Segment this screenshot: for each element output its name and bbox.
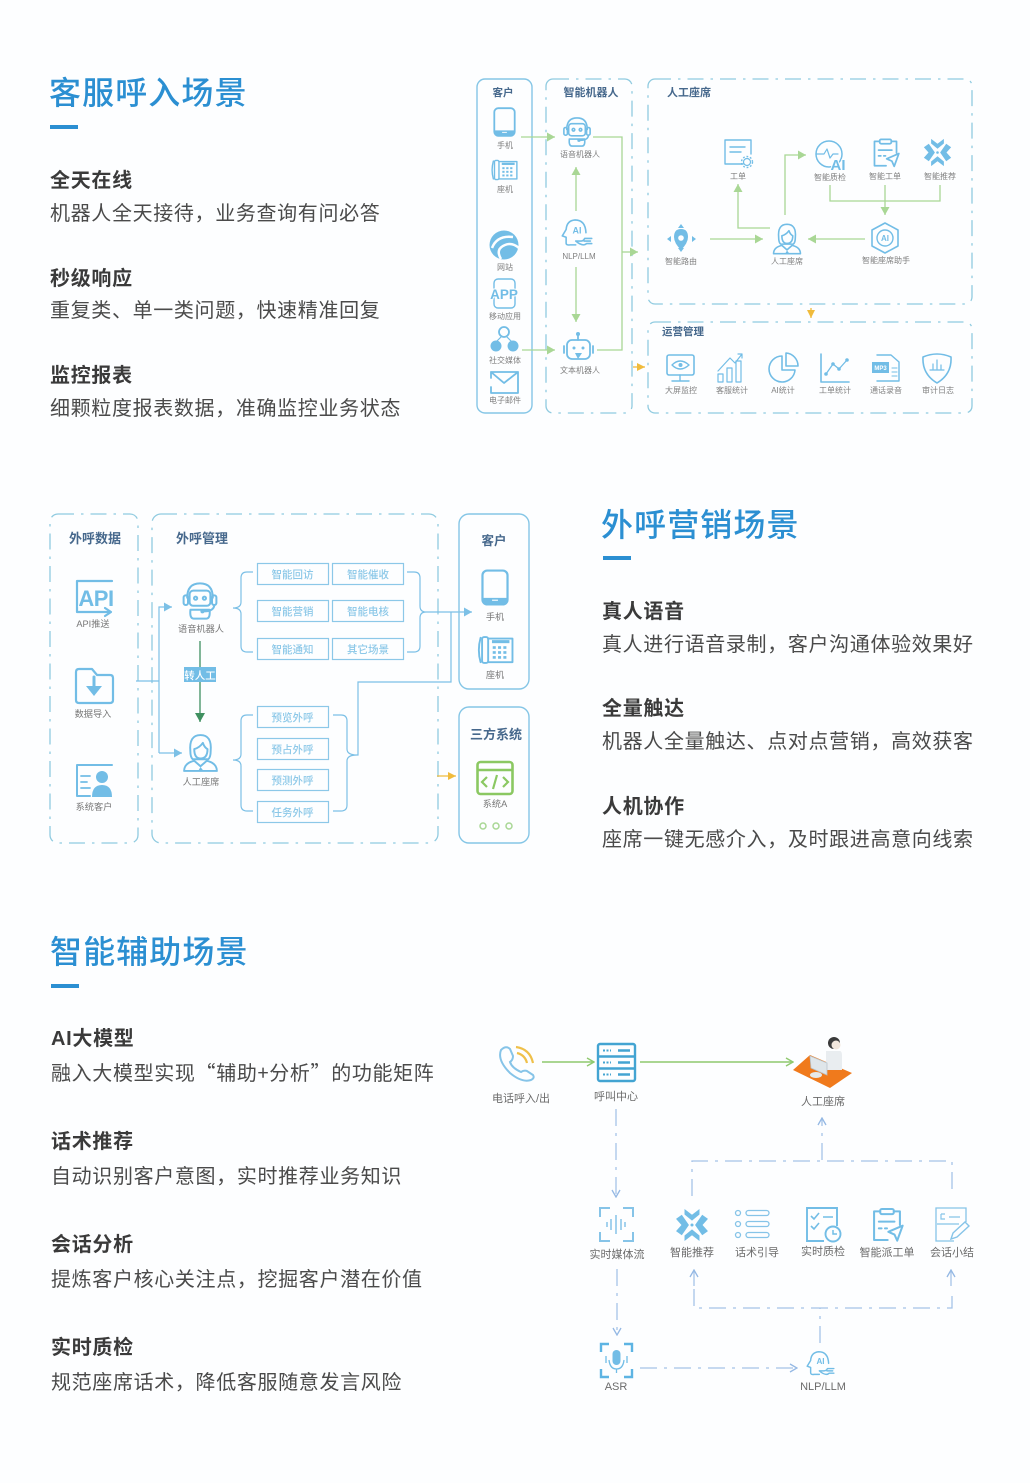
feature: human-machine collaboration: 人机协作	[602, 795, 685, 818]
task boxes: robot scenarios: 智能通知	[272, 643, 314, 656]
braces and connectors	[136, 572, 472, 811]
icon: quality inspection: 智能质检	[814, 172, 846, 182]
icon: phone call	[492, 1047, 550, 1105]
icon: human agent: 人工座席	[183, 776, 219, 787]
feature: conversation analysis: 提炼客户核心关注点，挖掘客户潜在价值	[51, 1268, 423, 1291]
feature: real-time QA	[51, 1335, 402, 1394]
icon: system customer	[76, 765, 112, 812]
title underline	[50, 125, 78, 129]
feature: monitoring reports: 细颗粒度报表数据，准确监控业务状态	[50, 397, 401, 420]
icon: ticket	[725, 140, 752, 181]
icon: AI stats: AI统计	[771, 385, 795, 395]
panel: operations management: 运营管理	[662, 325, 704, 338]
illustration: human agent at desk: 人工座席	[801, 1094, 845, 1108]
icon: call recording: MP3	[874, 366, 887, 372]
icon: mobile	[494, 108, 515, 150]
icon: API push: API	[78, 586, 114, 611]
title: 客服呼入场景	[49, 75, 248, 111]
feature: conversation analysis: 会话分析	[51, 1233, 134, 1256]
feature: real-time QA: 实时质检	[51, 1335, 134, 1359]
panel: smart robots	[546, 79, 632, 413]
task boxes: robot scenarios: 智能营销	[272, 605, 314, 618]
icon: text robot: 文本机器人	[560, 365, 600, 375]
feature: AI large model: AI大模型	[51, 1027, 134, 1050]
panel: customers	[459, 514, 529, 689]
icon: human agent: 人工座席	[771, 256, 803, 266]
icon: ASR: ASR	[605, 1381, 627, 1393]
panel: third-party systems	[459, 707, 529, 843]
icon: call center server	[594, 1044, 638, 1103]
icon: agent assistant: 智能座席助手	[862, 255, 910, 265]
icon: app: APP	[490, 287, 518, 302]
icon: smart routing	[665, 224, 697, 266]
diagram: outbound architecture	[50, 514, 529, 843]
icon: quality inspection	[814, 141, 846, 182]
icon: call recording	[870, 355, 902, 395]
task boxes: robot scenarios: 智能催收	[347, 568, 389, 581]
panel: outbound data: 外呼数据	[69, 531, 121, 546]
icon: system A: 系统A	[483, 798, 508, 809]
feature: all-day online: 全天在线	[50, 168, 133, 192]
icon: ticket: 工单	[730, 171, 746, 181]
feature: full reach: 机器人全量触达、点对点营销，高效获客	[602, 730, 974, 753]
icon: agent assistant: AI	[881, 234, 889, 243]
icon: script guide: 话术引导	[735, 1245, 779, 1259]
icon: desk phone: 座机	[486, 669, 504, 680]
feature: real voice: 真人进行语音录制，客户沟通体验效果好	[602, 633, 974, 656]
icon: service stats: 客服统计	[716, 385, 748, 395]
icon: mobile	[482, 571, 508, 622]
handoff arrow	[184, 641, 216, 722]
panel: third-party systems: 三方系统	[470, 727, 522, 742]
panel: human agents: 人工座席	[667, 85, 711, 99]
title: 外呼营销场景	[601, 507, 800, 543]
icon: quality inspection: AI	[830, 157, 846, 174]
icon: smart work order	[869, 139, 901, 181]
feature: instant response: 秒级响应	[50, 266, 133, 290]
feature: real-time QA: 规范座席话术，降低客服随意发言风险	[51, 1371, 402, 1394]
icon: mobile: 手机	[497, 140, 513, 150]
task boxes: agent call modes: 预占外呼	[272, 743, 314, 756]
diagram: inbound architecture	[477, 79, 972, 413]
icon: data import: 数据导入	[75, 708, 111, 719]
icon: mobile: 手机	[486, 611, 504, 622]
feature: real voice: 真人语音	[602, 599, 685, 623]
icon: agent assistant	[862, 223, 910, 265]
task boxes: robot scenarios: 其它场景	[347, 643, 389, 656]
arrows: assist flow	[542, 1062, 952, 1368]
icon: audit log	[922, 354, 954, 395]
icon: real-time media stream	[590, 1208, 644, 1261]
feature: conversation analysis	[51, 1233, 423, 1291]
section: outbound marketing text	[601, 507, 974, 851]
icon: API push	[76, 581, 114, 629]
icon: smart recommendation	[924, 139, 956, 181]
feature: all-day online: 机器人全天接待，业务查询有问必答	[50, 202, 380, 225]
task boxes: robot scenarios: 智能电核	[347, 605, 389, 618]
title underline	[51, 984, 79, 988]
panel: outbound management: 外呼管理	[176, 531, 228, 546]
icon: voice robot: 语音机器人	[178, 623, 224, 634]
feature: monitoring reports: 监控报表	[50, 364, 133, 387]
icon: smart recommendation: 智能推荐	[670, 1245, 714, 1259]
icon: smart dispatch: 智能派工单	[860, 1245, 914, 1259]
feature: all-day online	[50, 168, 380, 225]
icon: social media: 社交媒体	[489, 355, 521, 365]
feature: instant response	[50, 266, 380, 322]
icon: ticket stats	[819, 354, 851, 395]
icon: data import	[75, 669, 113, 719]
handoff arrow: 转人工	[184, 669, 216, 682]
icon: AI stats	[769, 353, 798, 395]
title underline	[603, 556, 631, 560]
icon: smart dispatch	[860, 1209, 914, 1259]
feature: script recommendation: 话术推荐	[51, 1130, 134, 1153]
status dots	[480, 823, 512, 829]
icon: API push: API推送	[76, 618, 110, 629]
title: 智能辅助场景	[50, 934, 249, 970]
panel: operations management	[648, 322, 972, 413]
feature: human-machine collaboration: 座席一键无感介入，及时跟进高意向线索	[602, 828, 974, 851]
icon: service stats	[716, 354, 748, 395]
task boxes: agent call modes: 预览外呼	[272, 711, 314, 724]
icon: voice robot	[560, 118, 600, 159]
icon: voice robot	[178, 583, 224, 634]
icon: desk phone	[479, 637, 512, 680]
feature: AI large model	[51, 1027, 434, 1086]
feature: full reach	[602, 696, 974, 753]
icon: NLP/LLM: NLP/LLM	[562, 252, 596, 261]
icon: app: 移动应用	[489, 311, 521, 321]
feature: script recommendation: 自动识别客户意图，实时推荐业务知识	[51, 1165, 402, 1188]
panel: outbound data	[50, 514, 138, 843]
feature: full reach: 全量触达	[602, 696, 685, 720]
panel: human agents	[648, 79, 972, 304]
icon: real-time QA: 实时质检	[801, 1244, 845, 1258]
icon: call recording: 通话录音	[870, 385, 902, 395]
icon: smart work order: 智能工单	[869, 171, 901, 181]
icon: session summary: 会话小结	[930, 1246, 974, 1259]
feature: script recommendation	[51, 1130, 402, 1188]
panel: outbound management	[136, 514, 472, 843]
panel: customers: 客户	[481, 533, 507, 548]
panel: customers: 客户	[492, 86, 514, 99]
icon: desk phone	[492, 160, 517, 194]
task boxes: agent call modes: 预测外呼	[272, 774, 314, 787]
icon: smart recommendation: 智能推荐	[924, 171, 956, 181]
icon: human agent	[183, 735, 219, 787]
feature: human-machine collaboration	[602, 795, 974, 851]
icon: real-time QA	[801, 1208, 845, 1258]
icon: audit log: 审计日志	[922, 385, 954, 395]
feature: AI large model: 融入大模型实现“辅助+分析”的功能矩阵	[51, 1057, 434, 1086]
feature: real voice	[602, 599, 974, 656]
icon: website: 网站	[497, 262, 513, 272]
panel: smart robots: 智能机器人	[564, 85, 618, 99]
task boxes: agent call modes	[258, 706, 328, 822]
icon: social media	[489, 327, 521, 365]
icon: NLP/LLM	[562, 220, 596, 261]
section: customer inbound text	[49, 75, 401, 420]
feature: monitoring reports	[50, 364, 401, 420]
icon: human agent	[771, 224, 803, 266]
icon: website	[490, 230, 519, 272]
icon: call center server: 呼叫中心	[594, 1090, 638, 1103]
icon: app	[489, 279, 521, 321]
feature: instant response: 重复类、单一类问题，快速精准回复	[50, 299, 380, 322]
icon: script guide	[735, 1210, 779, 1259]
icon: big screen: 大屏监控	[665, 385, 697, 395]
arrows: inbound flow	[521, 137, 940, 367]
icon: phone call: 电话呼入/出	[492, 1091, 550, 1105]
icon: text robot	[560, 332, 600, 375]
icon: email	[489, 372, 521, 405]
diagram: smart assist flow	[492, 1037, 974, 1393]
icon: smart recommendation	[670, 1209, 714, 1259]
icon: voice robot: 语音机器人	[560, 149, 600, 159]
icon: session summary	[930, 1208, 974, 1259]
task boxes: agent call modes: 任务外呼	[272, 806, 314, 819]
icon: big screen	[665, 355, 697, 395]
icon: ASR	[601, 1344, 632, 1393]
panel: customers	[477, 79, 532, 413]
icon: ticket stats: 工单统计	[819, 385, 851, 395]
illustration: human agent at desk	[793, 1037, 852, 1108]
task boxes: robot scenarios	[258, 564, 404, 660]
icon: email: 电子邮件	[489, 395, 521, 405]
icon: smart routing: 智能路由	[665, 256, 697, 266]
icon: real-time media stream: 实时媒体流	[590, 1247, 644, 1261]
icon: system customer: 系统客户	[76, 801, 112, 812]
icon: NLP/LLM	[800, 1352, 846, 1393]
task boxes: robot scenarios: 智能回访	[272, 568, 314, 581]
section: smart assist text	[50, 934, 434, 1394]
icon: NLP/LLM: NLP/LLM	[800, 1381, 846, 1393]
icon: desk phone: 座机	[497, 184, 513, 194]
